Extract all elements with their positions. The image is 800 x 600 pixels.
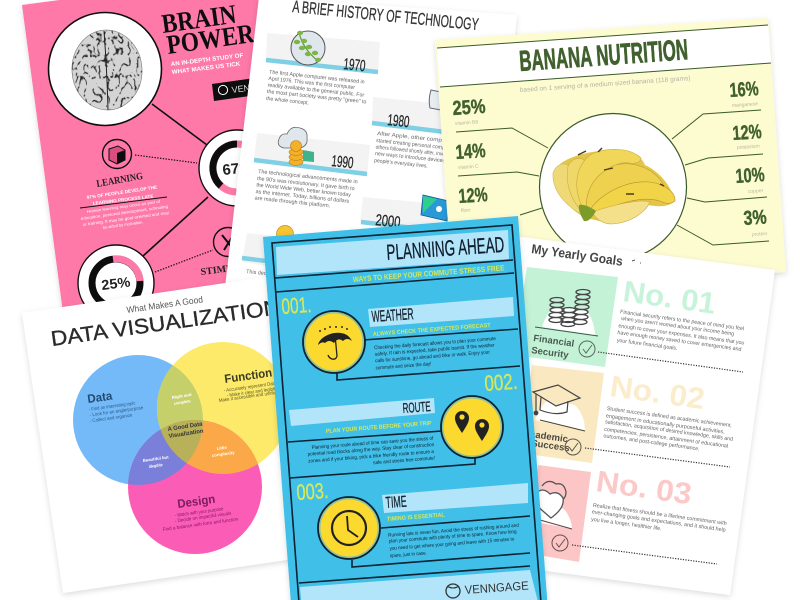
stats right: 3% [743, 206, 767, 230]
label: Function [218, 365, 277, 404]
frame lines [272, 225, 541, 600]
entry: 1990 [254, 127, 370, 209]
section: learning text: Human learning may occur as part of [86, 199, 161, 214]
panel: My Yearly Goals [470, 236, 775, 595]
section 003: time: 003. [296, 478, 329, 505]
section 003: time: TIMING IS ESSENTIAL [387, 513, 445, 523]
entry: 1970 [266, 31, 380, 106]
donut chart: 67% [199, 130, 275, 206]
entry: 1990: the 90's was revolutionary. It gave birth to [257, 176, 355, 192]
panel: Planning Ahead [263, 216, 548, 600]
heading: Brain Power [160, 0, 256, 60]
connector lines [456, 110, 769, 245]
entry: 1990: as the internet. Today, billions of dollars [255, 189, 350, 205]
entry: 1970: 1970 [343, 56, 366, 75]
label: Data: - Collect and organize [89, 413, 133, 424]
goal 1: financial security [513, 267, 745, 372]
label: overlap function and design [211, 445, 236, 458]
label: Design: Find a balance with form and function [162, 516, 239, 533]
panel: A Brief History of Technology [220, 0, 517, 360]
label: financial security: Security [531, 345, 570, 361]
subtitle: WAYS TO KEEP YOUR COMMUTE STRESS FREE [352, 263, 505, 284]
label: financial security [531, 333, 575, 361]
entry: 1970: the most part society was pretty "green" to [267, 89, 367, 105]
goal 2: academic success [520, 365, 733, 467]
section 002: route: ROUTE [402, 398, 431, 416]
logo badge: Venngage: VENNGAGE [231, 79, 283, 95]
text block: have enough money saved to cover emergencies and [617, 330, 742, 353]
label: overlap data and function: Right and [171, 392, 192, 400]
text block: you need to get where your going and leave with 15 minutes to [389, 536, 515, 552]
text block: enough to cover your expenses. It also means that you [618, 323, 745, 347]
entry: 1980: After Apple, other companies [377, 131, 457, 145]
icon: learning cube [102, 140, 132, 168]
text block: Planning your route ahead of time can save you the stress of [311, 436, 434, 451]
label: Function: Make it accessible and useful [218, 390, 277, 404]
goal 3: fitness [527, 465, 727, 564]
entry: 2010 [242, 226, 360, 280]
label: overlap centre: A Good Data [167, 421, 204, 433]
text block: calls for sunshine, go ahead and bike or walk. Enjoy your [375, 349, 490, 364]
section 001: weather: 001. [281, 292, 312, 319]
label: Function: - Accurately represent Data [223, 381, 277, 394]
icon: coin stacks [542, 290, 595, 335]
brain illustration [48, 12, 162, 126]
entry: 2000: 2000 [375, 212, 401, 232]
title band [437, 25, 771, 87]
section: learning text: education, personal development, schooling [80, 204, 169, 221]
panel: Brain Power poster [22, 0, 342, 321]
entry: 2000 [360, 195, 450, 235]
entry: 1990: are made through this platform. [254, 196, 331, 209]
label: financial security: Financial [533, 333, 575, 350]
stats right [729, 78, 768, 238]
section 002: route: PLAN YOUR ROUTE BEFORE YOUR TRIP [326, 421, 432, 435]
entry: 1970: April 1976. This was the first computer [268, 76, 355, 91]
section heading: stimulation: STIMULATION [200, 258, 273, 278]
label: overlap data and function [171, 392, 192, 406]
icon: location pins [441, 396, 503, 458]
section: learning text: 97% OF PEOPLE DEVELOP THE [86, 185, 157, 200]
entry: 1980: started creating personal computers [376, 138, 456, 152]
label: overlap centre: Visualization [168, 429, 204, 440]
entry: 1980: new ways to introduce devices into [375, 151, 455, 165]
icon: check [579, 341, 595, 357]
label: overlap function and design: Little [216, 445, 228, 451]
section 001: weather: ALWAYS CHECK THE EXPECTED FORECAST [373, 323, 491, 338]
banana image circle [540, 114, 686, 260]
title band: PLANNING AHEAD [386, 232, 505, 265]
icon: stimulation [214, 228, 242, 256]
heading: Brain Power: POWER [165, 18, 256, 60]
entry: 1980: people's everyday lives. [374, 158, 428, 170]
label: overlap function and design: complexity [211, 450, 236, 458]
label: Design: Design [176, 492, 216, 511]
text block: zones and if your biking, pick a bike friendly route to ensure a [308, 449, 434, 465]
panel: Data Visualization [20, 283, 288, 596]
text block: Realize that fitness should be a lifetime commitment with [592, 503, 727, 527]
section 001: weather: WEATHER [371, 306, 414, 326]
text block: satisfaction, acquisition of desired knowledge, skills and [605, 419, 733, 443]
stats right: 12% [732, 121, 762, 145]
subtitle: AN IN-DEPTH STUDY OF [171, 53, 244, 68]
text block: you live a longer, healthier life. [591, 517, 662, 532]
label: Design: - Decide on impactful visuals [174, 511, 232, 524]
label: overlap data and design: Beautiful but [142, 454, 169, 463]
stats left: 12% [458, 184, 488, 208]
label: overlap data and design: illegible [148, 462, 164, 469]
text block [307, 436, 435, 466]
icon: plant sprig [291, 31, 325, 65]
text block: ever-changing goals and expectations, and it should help [591, 509, 726, 534]
icon: hearts [535, 481, 572, 529]
label: academic success [523, 428, 570, 454]
panel: Banana Nutrition [435, 18, 786, 296]
entry: 1980 [372, 90, 457, 170]
section 001: weather [281, 292, 520, 380]
text block: Running late is never fun. Avoid the stress of rushing around and [388, 523, 519, 539]
section 002: route: 002. [484, 369, 518, 396]
text block: when you aren't worried about your income being [620, 316, 734, 337]
text block: your future financial goals. [616, 338, 678, 352]
icon: graduation cap [533, 385, 585, 431]
icon: sun [276, 226, 294, 242]
label: overlap centre [167, 421, 204, 440]
icon: clock [318, 497, 380, 559]
label: Design: - Match with your purpose [174, 506, 224, 519]
venn diagram [73, 342, 289, 554]
stats right: potassium [737, 143, 760, 151]
stats right: protein [752, 231, 768, 238]
stats left: vitamin C [458, 164, 479, 171]
icon: monitor [421, 195, 449, 221]
subtitle [171, 53, 244, 76]
section 003: time [296, 478, 530, 583]
entry: 1990: the World Wide Web, better known today [256, 183, 351, 198]
title: What Makes A Good [126, 294, 204, 315]
label: Data [86, 389, 144, 424]
label: Function: - Make it clear and legible [226, 386, 277, 399]
stats left: 25% [452, 96, 486, 120]
text block: Financial security refers to the peace of mind you feel [620, 309, 744, 332]
section: learning text: LEARNING PROCESS LATE [93, 194, 154, 206]
text block [616, 309, 745, 353]
icon: check [565, 439, 581, 455]
text block [374, 336, 496, 371]
section: learning text: LEARNING [96, 171, 144, 190]
label: Data: - Find an interesting topic [88, 400, 136, 413]
entry: 1980: others followed shortly after, inventing [375, 145, 455, 159]
entry: 1970: the whole concept. [266, 96, 309, 106]
stats right: manganese [732, 101, 758, 109]
icon: check [552, 535, 568, 551]
entry: 1990: The technological advancements made in [258, 169, 358, 185]
text block: outcomes, and post-college performance. [603, 433, 700, 452]
donut chart: 25% [78, 245, 154, 321]
connector lines [135, 104, 213, 272]
section 003: time: TIME [385, 494, 407, 512]
section 002: route [288, 369, 518, 478]
text block: Checking the daily forecast allows you to plan your commute [374, 336, 496, 351]
section: learning text [80, 171, 170, 230]
label: Design [162, 492, 239, 533]
text block: competencies, persistence, attainment of educational [604, 427, 728, 450]
heading: No. 02: No. 02 [608, 370, 707, 416]
title: DATA VISUALIZATION [49, 296, 281, 351]
stats right: 16% [729, 78, 759, 102]
text block: safely. If rain is expected, take public transit. If the weather [375, 342, 495, 358]
footer band with logo: VENNGAGE [464, 579, 529, 597]
stats left [452, 96, 488, 214]
label: academic success: Success [531, 438, 570, 454]
title band [276, 230, 509, 275]
text block [603, 406, 733, 452]
icon: cloud and coins [278, 127, 314, 165]
stats left: fiber [461, 207, 471, 214]
label: Function: Function [223, 365, 273, 386]
title: My Yearly Goals [531, 241, 624, 269]
section: learning text: or training. It may be goal-oriented and may [82, 210, 170, 227]
stats right: copper [748, 188, 764, 195]
label: overlap data and design [142, 454, 169, 469]
entry: 2010: This decade [246, 269, 276, 278]
donut chart: 25%: 25% [100, 273, 132, 293]
icon: cup outline [429, 90, 441, 110]
entry: 1990: 1990 [331, 153, 354, 172]
icon: umbrella [303, 311, 365, 373]
label: Data: Data [86, 389, 113, 406]
donut chart: 67%: 67% [222, 159, 253, 179]
label: academic success: Academic [523, 428, 569, 445]
stats right: 10% [735, 164, 765, 188]
text block: commute and seize the day! [375, 361, 432, 371]
entry: 1970: The first Apple computer was released in [269, 70, 365, 86]
label: Data: - Look for an angle/purpose [89, 405, 144, 418]
footer band with logo [300, 570, 540, 600]
text block: safe and stress free commute! [373, 455, 435, 466]
subtitle: based on 1 serving of a medium sized banana (118 grams) [520, 75, 691, 94]
entry: 1970: readily available to the general public. For [267, 83, 365, 99]
logo badge: Venngage [212, 77, 283, 101]
text block: potential road blocks along the way. Stay clear of construction [307, 442, 435, 458]
text block: plan your commute with plenty of time to spare. Know how long [389, 529, 517, 545]
heading: No. 03: No. 03 [594, 465, 694, 511]
text block: engagement in educationally purposeful activities, [605, 413, 726, 436]
heading: No. 01: No. 01 [621, 275, 718, 321]
subtitle: WHAT MAKES US TICK [172, 62, 241, 76]
text block [388, 523, 519, 559]
stats left: 14% [455, 140, 486, 164]
text block: Student success is defined as academic achievement, [606, 406, 733, 429]
entry: 1980: 1980 [387, 112, 410, 131]
stats left: vitamin B6 [455, 119, 479, 127]
section: learning text: be aided by motivation. [102, 219, 144, 230]
text block: spare, just in case. [390, 550, 427, 559]
label: overlap data and function: complete [173, 398, 192, 406]
